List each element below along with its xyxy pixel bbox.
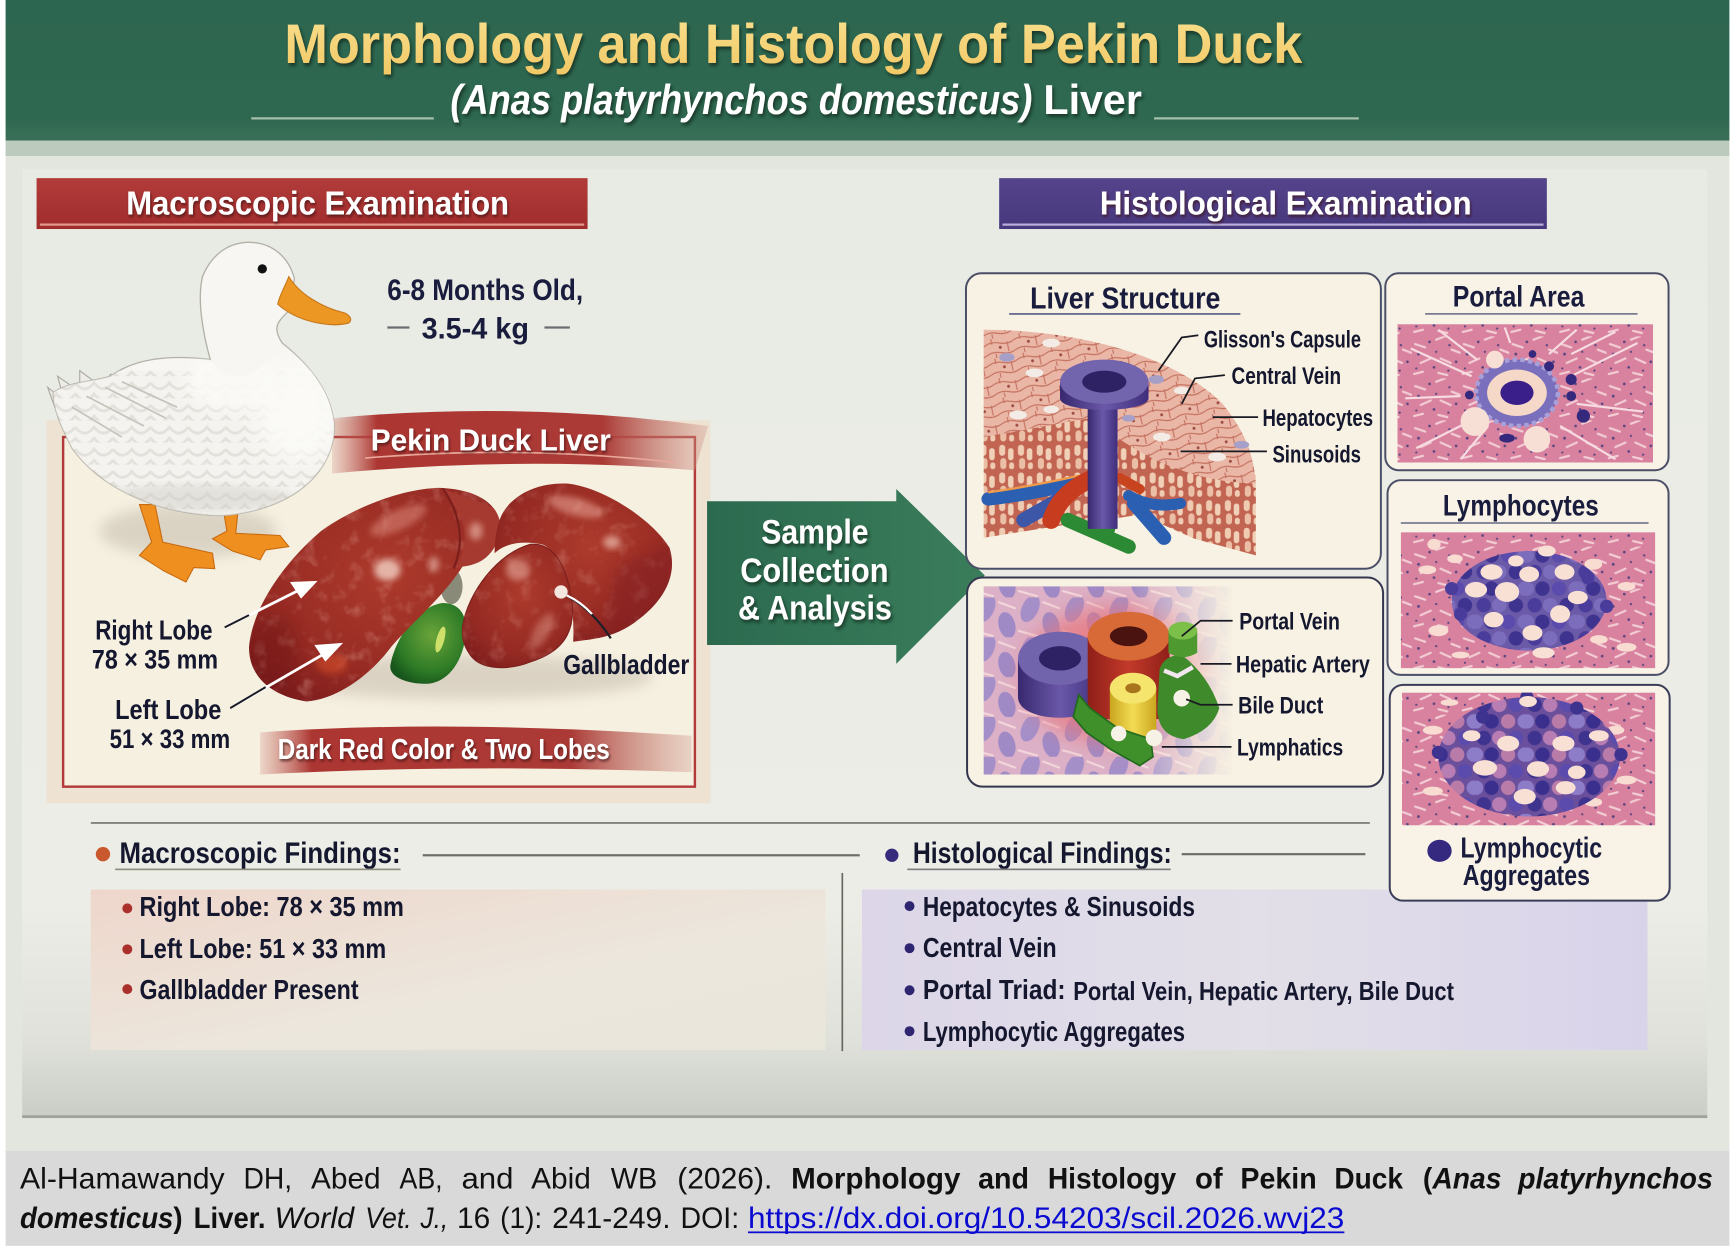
label: left lobe: 51 × 33 mm	[110, 724, 230, 754]
heading: histological findings	[885, 837, 1365, 870]
finding: portal triad	[905, 974, 1454, 1006]
heading: histological examination: Histological Examination	[1100, 186, 1472, 223]
citation: Vet.	[365, 1202, 412, 1235]
heading: lymphocytes: Lymphocytes	[1443, 490, 1599, 523]
citation: Morphology	[791, 1162, 961, 1195]
micrograph: portal area	[1397, 324, 1653, 462]
citation: World	[274, 1202, 356, 1235]
citation: platyrhynchos	[1517, 1162, 1713, 1195]
callout: portal vein: Portal Vein	[1239, 609, 1340, 636]
subtitle: Liver	[1043, 76, 1142, 123]
heading: macroscopic examination	[37, 178, 588, 229]
citation: Duck	[1334, 1162, 1403, 1195]
panel: liver structure	[966, 273, 1381, 569]
legend: lymphocytic aggregates: Aggregates	[1463, 860, 1590, 892]
panel: histological findings list	[862, 890, 1648, 1050]
callout: lymphatics: Lymphatics	[1237, 735, 1343, 762]
heading: macroscopic findings	[96, 837, 860, 870]
citation: (1):	[500, 1202, 542, 1235]
callout: sinusoids: Sinusoids	[1272, 441, 1361, 468]
callout: gallbladder	[554, 585, 690, 680]
heading: liver structure: Liver Structure	[1030, 281, 1220, 316]
panel: portal area	[1385, 273, 1669, 470]
ribbon: dark red color and two lobes: Dark Red Color & Two Lobes	[278, 734, 610, 766]
citation	[6, 1151, 1729, 1246]
label: right lobe: Right Lobe	[95, 615, 212, 646]
illustration: hepatic artery cylinder	[1088, 612, 1170, 719]
gallbladder illustration	[390, 569, 466, 684]
citation: and	[978, 1162, 1029, 1195]
liver left lobe	[459, 481, 681, 673]
illustration: portal tissue	[984, 586, 1233, 774]
title: Morphology and Histology of Pekin Duck	[284, 13, 1303, 75]
duck tail feathers	[48, 371, 133, 448]
citation: 16	[457, 1202, 490, 1235]
citation: 241-249.	[552, 1202, 671, 1235]
heading: macroscopic findings: Macroscopic Findings:	[120, 837, 401, 870]
finding: left lobe: Left Lobe: 51 × 33 mm	[139, 933, 386, 964]
citation: Abed	[311, 1162, 381, 1195]
callout: central vein	[1182, 363, 1341, 404]
citation: Pekin	[1240, 1162, 1317, 1195]
finding: right lobe: Right Lobe: 78 × 35 mm	[139, 891, 404, 922]
panel: lymphocytic aggregates	[1390, 685, 1670, 901]
legend: lymphocytic aggregates: Lymphocytic	[1461, 832, 1602, 864]
arrow: left lobe	[230, 643, 343, 708]
citation: (2026).	[677, 1162, 772, 1195]
micrograph: lymphocytic aggregates	[1402, 690, 1655, 825]
duck beak	[278, 277, 351, 325]
label: age and weight: 6-8 Months Old,	[387, 274, 583, 307]
citation: Liver.	[194, 1202, 266, 1235]
citation: https://dx.doi.org/10.54203/scil.2026.wvj23	[748, 1202, 1344, 1235]
heading: portal area: Portal Area	[1453, 280, 1585, 313]
callout: bile duct: Bile Duct	[1238, 693, 1323, 720]
panel: pekin duck liver	[47, 411, 710, 803]
icon: left foot	[139, 505, 215, 582]
citation: domesticus)	[20, 1202, 183, 1235]
ribbon: pekin duck liver	[332, 411, 708, 474]
callout: hepatocytes: Hepatocytes	[1262, 405, 1373, 432]
title banner	[6, 0, 1729, 141]
illustration: duck	[48, 242, 351, 582]
citation: (Anas	[1423, 1162, 1501, 1195]
ribbon: dark red color and two lobes	[260, 727, 692, 774]
duck eye	[258, 264, 267, 274]
liver shadow	[277, 655, 653, 699]
finding: hepatocytes and sinusoids: Hepatocytes & Sinusoids	[923, 891, 1195, 922]
arrow: sample collection and analysis: Sample	[761, 513, 869, 551]
label: right lobe	[92, 615, 249, 674]
label: left lobe	[110, 687, 266, 754]
citation: DOI:	[681, 1202, 739, 1235]
illustration: portal vein cylinder	[1018, 632, 1102, 718]
citation: J.,	[420, 1202, 448, 1235]
citation: WB	[611, 1162, 657, 1195]
finding: lymphocytic aggregates: Lymphocytic Aggregates	[923, 1016, 1185, 1047]
label: age and weight	[387, 274, 583, 346]
callout: glisson's capsule	[1158, 326, 1361, 371]
icon: right foot	[212, 511, 289, 560]
label: age and weight: 3.5-4 kg	[422, 313, 529, 346]
finding: portal triad: Portal Triad:	[923, 974, 1066, 1005]
panel: portal triad	[967, 578, 1383, 787]
arrow: sample collection and analysis: & Analysis	[738, 590, 892, 628]
citation: of	[1195, 1162, 1223, 1195]
illustration: central vein	[1060, 360, 1149, 529]
label: left lobe: Left Lobe	[115, 694, 221, 725]
callout: gallbladder: Gallbladder	[563, 649, 690, 680]
subtitle: (Anas platyrhynchos domesticus)	[450, 76, 1032, 123]
illustration: liver block	[984, 330, 1256, 555]
citation: Abid	[531, 1162, 591, 1195]
arrow: sample collection and analysis: Collection	[740, 552, 889, 590]
duck feathers	[53, 353, 343, 520]
duck body	[53, 242, 334, 516]
micrograph: lymphocytes	[1401, 532, 1655, 668]
callout: glisson's capsule: Glisson's Capsule	[1204, 326, 1361, 353]
citation: AB,	[399, 1162, 443, 1195]
label: right lobe: 78 × 35 mm	[92, 644, 218, 674]
panel: macroscopic findings list	[91, 890, 825, 1050]
callout: bile duct	[1186, 693, 1323, 720]
heading: macroscopic examination: Macroscopic Examination	[126, 186, 509, 223]
callout: portal vein	[1182, 609, 1340, 636]
liver right lobe	[243, 485, 509, 706]
panel: lymphocytes	[1388, 480, 1669, 675]
callout: central vein: Central Vein	[1232, 363, 1341, 390]
legend: lymphocytic aggregates	[1427, 832, 1602, 892]
illustration: lymphatics	[1073, 622, 1219, 766]
finding: central vein: Central Vein	[923, 932, 1057, 963]
citation: Al-Hamawandy	[20, 1162, 225, 1195]
citation: DH,	[243, 1162, 292, 1195]
finding: gallbladder present: Gallbladder Present	[139, 974, 359, 1005]
citation: and	[461, 1162, 513, 1195]
citation: Histology	[1048, 1162, 1177, 1195]
illustration: bile duct cylinder	[1110, 673, 1156, 740]
finding: portal triad: Portal Vein, Hepatic Artery, Bile Duct	[1073, 978, 1454, 1006]
illustration: vessels	[988, 476, 1181, 547]
heading: histological examination	[999, 178, 1547, 229]
arrow: sample collection and analysis	[707, 489, 985, 664]
arrow: right lobe	[225, 581, 318, 627]
ribbon: pekin duck liver: Pekin Duck Liver	[371, 422, 611, 457]
heading: histological findings: Histological Findings:	[913, 837, 1172, 870]
callout: hepatic artery: Hepatic Artery	[1236, 652, 1370, 679]
